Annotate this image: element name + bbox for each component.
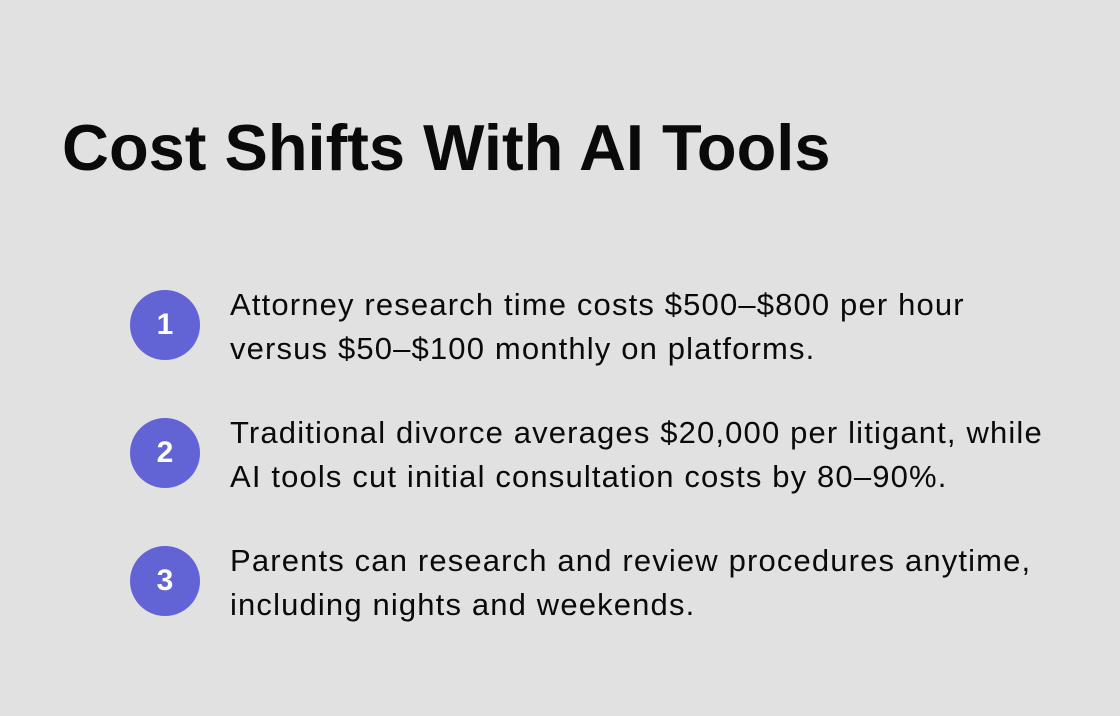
icon: number 1 — [130, 290, 200, 360]
text 3 — [230, 543, 1031, 622]
text 1 — [230, 287, 965, 366]
text 3: including nights and weekends. — [230, 587, 695, 622]
text 2 — [230, 415, 1043, 494]
text 2: AI tools cut initial consultation costs by 80–90%. — [230, 459, 947, 494]
icon: number 2: 2 — [157, 436, 173, 469]
text 1: Attorney research time costs $500–$800 per hour — [230, 287, 965, 322]
item 3 — [130, 543, 1031, 622]
title: Cost Shifts With AI Tools — [62, 111, 831, 184]
icon: number 3 — [130, 546, 200, 616]
icon: number 2 — [130, 418, 200, 488]
text 1: versus $50–$100 monthly on platforms. — [230, 331, 815, 366]
item 2 — [130, 415, 1043, 494]
icon: number 1: 1 — [157, 308, 173, 341]
item 1 — [130, 287, 965, 366]
text 3: Parents can research and review procedures anytime, — [230, 543, 1031, 578]
icon: number 3: 3 — [157, 564, 173, 597]
text 2: Traditional divorce averages $20,000 per litigant, while — [230, 415, 1043, 450]
